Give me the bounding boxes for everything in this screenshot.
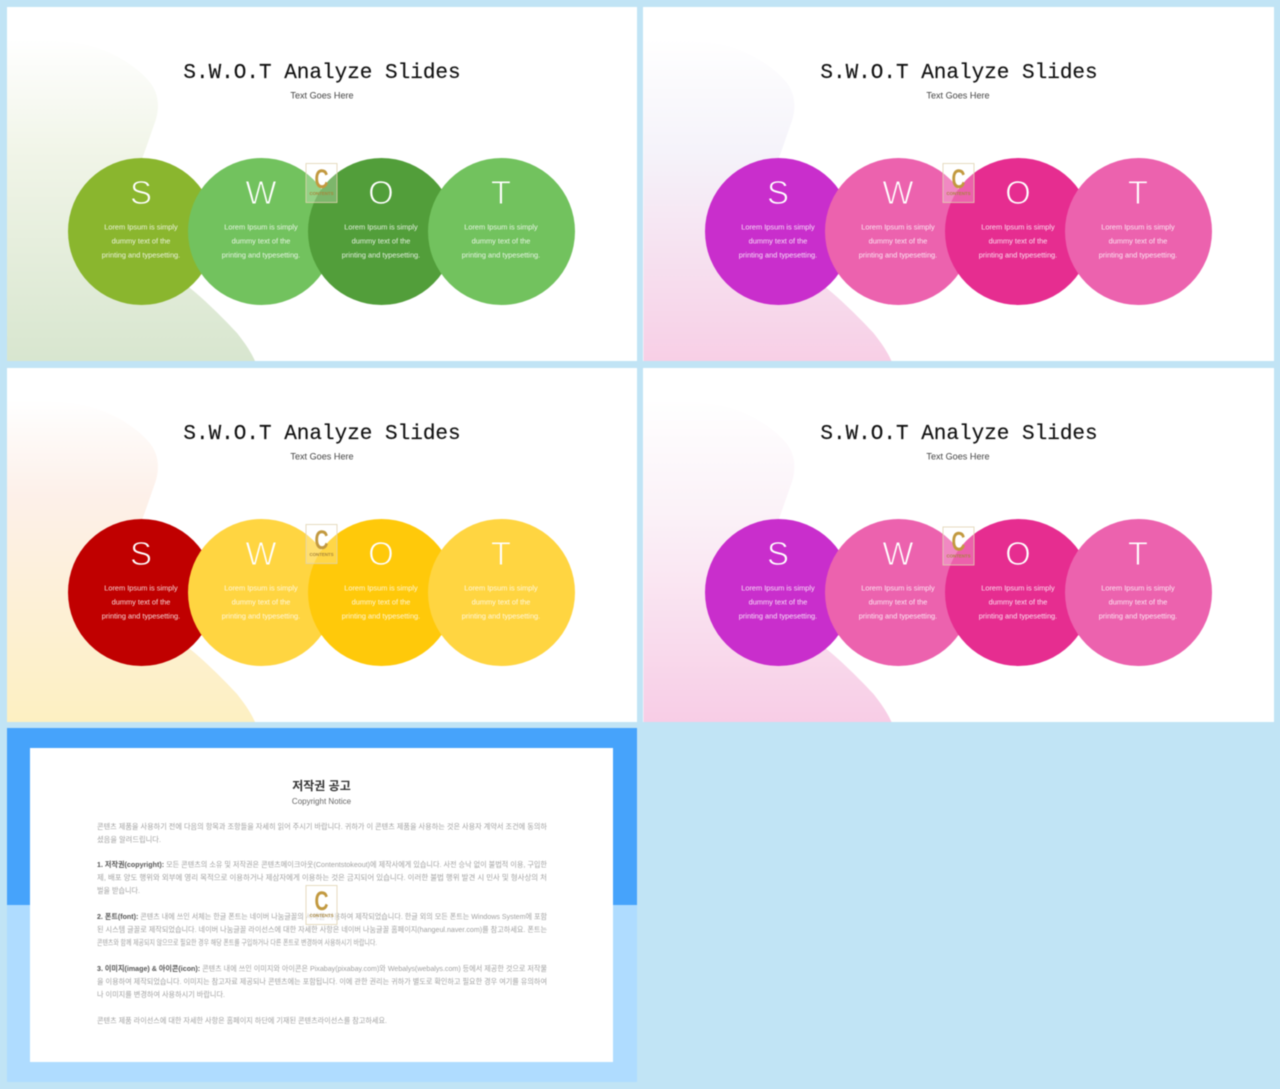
title: S.W.O.T Analyze Slides <box>820 423 1098 446</box>
section 3: image and icon: 을 이용하여 제작되었습니다. 이미지는 참고자료 제공되나 콘텐츠에는 포함됩니다. 이에 관한 권리는 귀하가 별도로 확인하고 필요한 경우 여기를 유의하여 <box>97 976 547 986</box>
circle O <box>945 158 1092 305</box>
circle O: Lorem Ipsum is simply <box>981 584 1055 592</box>
subtitle: Text Goes Here <box>290 452 354 462</box>
circle W: printing and typesetting. <box>222 250 300 260</box>
circle S: Lorem Ipsum is simply <box>104 222 178 232</box>
circle O: Lorem Ipsum is simply <box>344 222 418 232</box>
circle W: W <box>882 535 914 572</box>
circle T <box>1065 158 1212 305</box>
circle O: printing and typesetting. <box>979 250 1057 260</box>
circle O: dummy text of the <box>989 236 1047 246</box>
circle T: printing and typesetting. <box>462 612 540 620</box>
circle S: Lorem Ipsum is simply <box>741 584 815 592</box>
circle W: printing and typesetting. <box>859 250 937 260</box>
circle S: dummy text of the <box>749 598 807 606</box>
watermark logo: CONTENTS <box>310 552 334 557</box>
slide 5: copyright notice <box>7 728 637 1082</box>
circle S: dummy text of the <box>112 598 170 606</box>
circle O: dummy text of the <box>989 598 1047 606</box>
watermark logo <box>306 524 337 564</box>
watermark logo <box>306 886 337 924</box>
white notice panel <box>30 748 613 1062</box>
watermark logo: C <box>952 164 966 194</box>
circle W: printing and typesetting. <box>859 612 937 620</box>
circle W: W <box>882 174 914 211</box>
circle T <box>1065 519 1212 666</box>
background blob: peach to yellow <box>7 400 255 722</box>
circle S: Lorem Ipsum is simply <box>741 222 815 232</box>
circle T: dummy text of the <box>1109 598 1167 606</box>
circle S: printing and typesetting. <box>102 612 180 620</box>
watermark logo <box>306 164 337 202</box>
circle W: Lorem Ipsum is simply <box>861 222 935 232</box>
circle W <box>825 158 972 305</box>
circle T: printing and typesetting. <box>1099 250 1177 260</box>
slide 4: magenta SWOT variant <box>643 368 1274 722</box>
section 3: image and icon <box>97 963 547 999</box>
circle W <box>825 519 972 666</box>
upper blue band <box>7 728 637 905</box>
watermark logo <box>943 164 974 202</box>
watermark logo: C <box>952 526 966 556</box>
watermark logo <box>943 526 974 565</box>
circle T: T <box>491 174 511 211</box>
watermark logo: C <box>314 886 328 916</box>
title: S.W.O.T Analyze Slides <box>183 423 461 446</box>
section 1: copyright: 벌을 받습니다. <box>97 885 140 895</box>
watermark logo: CONTENTS <box>946 191 970 196</box>
circle T: dummy text of the <box>472 598 530 606</box>
watermark logo: CONTENTS <box>946 554 970 558</box>
slide 1: green SWOT <box>7 7 637 361</box>
section 3: image and icon: 나 이미지를 변경하여 사용하시기 바랍니다. <box>97 989 225 999</box>
background blob: green <box>7 39 255 361</box>
circle W: dummy text of the <box>232 598 290 606</box>
slide 3: red and yellow SWOT <box>7 368 637 722</box>
notice heading: 저작권 공고 <box>292 778 351 793</box>
subtitle: Text Goes Here <box>926 452 990 462</box>
subtitle: Text Goes Here <box>926 90 990 100</box>
circle T: T <box>1128 174 1148 211</box>
circle S: dummy text of the <box>749 236 807 246</box>
circle O <box>308 519 455 666</box>
circle W <box>188 519 335 666</box>
circle O: printing and typesetting. <box>342 612 420 620</box>
watermark logo: CONTENTS <box>310 913 334 918</box>
circle O: printing and typesetting. <box>979 612 1057 620</box>
circle W: Lorem Ipsum is simply <box>861 584 935 592</box>
circle S: printing and typesetting. <box>739 250 817 260</box>
circle W <box>188 158 335 305</box>
circle S <box>68 158 215 305</box>
circle S: Lorem Ipsum is simply <box>104 584 178 592</box>
section 2: font: 콘텐츠와 함께 제공되지 않으므로 필요한 경우 해당 폰트를 구입하거나 다른 폰트로 변경하여 사용하시기 바랍니다. <box>97 937 377 947</box>
section 2: font: 2. 폰트(font): 콘텐츠 내에 쓰인 서체는 한글 폰트는 네이버 나눔글꼴의 서체를 사용하여 제작되었습니다. 한글 외의 모든 폰트는 Windows System에 포함 <box>97 911 547 921</box>
circle O: O <box>368 174 394 211</box>
circle W: dummy text of the <box>232 236 290 246</box>
background blob: lavender to pink <box>644 39 892 361</box>
circle O: dummy text of the <box>352 236 410 246</box>
watermark logo: C <box>314 164 328 194</box>
circle S: S <box>130 174 152 211</box>
circle W: Lorem Ipsum is simply <box>224 222 298 232</box>
circle T: printing and typesetting. <box>462 250 540 260</box>
circle O: printing and typesetting. <box>342 250 420 260</box>
title: S.W.O.T Analyze Slides <box>183 62 461 85</box>
subtitle: Text Goes Here <box>290 90 354 100</box>
watermark logo: C <box>314 525 328 555</box>
circle T: Lorem Ipsum is simply <box>464 584 538 592</box>
notice intro: 셨음을 알려드립니다. <box>97 834 161 844</box>
circle O: O <box>1005 174 1031 211</box>
section 2: font <box>97 911 547 947</box>
circle W: dummy text of the <box>869 598 927 606</box>
notice intro: 콘텐츠 제품을 사용하기 전에 다음의 항목과 조항들을 자세히 읽어 주시기 바랍니다. 귀하가 이 콘텐츠 제품을 사용하는 것은 사용자 계약서 조건에 동의하 <box>97 821 547 831</box>
circle S: printing and typesetting. <box>102 250 180 260</box>
section 1: copyright: 1. 저작권(copyright): 모든 콘텐츠의 소유 및 저작권은 콘텐츠메이크아웃(Contentstokeout)에 제작사에게 있습니다. 사전 승낙 없이 불법적 이용, 구입한 <box>97 859 547 869</box>
circle S: printing and typesetting. <box>739 612 817 620</box>
slide 2: magenta SWOT <box>643 7 1274 361</box>
circle T: Lorem Ipsum is simply <box>1101 584 1175 592</box>
circle S: S <box>767 535 789 572</box>
circle T: printing and typesetting. <box>1099 612 1177 620</box>
circle T: Lorem Ipsum is simply <box>1101 222 1175 232</box>
notice intro <box>97 821 547 844</box>
section 1: copyright: 제, 배포 양도 행위와 외부에 영리 목적으로 이용하거나 제삼자에게 이용하는 것은 금지되어 있습니다. 이러한 불법 행위 발견 시 민사 및 형사상의 처 <box>97 872 547 882</box>
circle O: Lorem Ipsum is simply <box>344 584 418 592</box>
background blob: white to pink <box>644 400 892 722</box>
circle T <box>428 519 575 666</box>
circle W: dummy text of the <box>869 236 927 246</box>
circle W: W <box>245 535 277 572</box>
circle T <box>428 158 575 305</box>
circle W: printing and typesetting. <box>222 612 300 620</box>
circle S <box>705 519 852 666</box>
circle T: dummy text of the <box>472 236 530 246</box>
circle S <box>68 519 215 666</box>
watermark logo: CONTENTS <box>310 191 334 196</box>
closing line: 콘텐츠 제품 라이선스에 대한 자세한 사항은 홈페이지 하단에 기재된 콘텐츠라이선스를 참고하세요. <box>97 1015 387 1025</box>
circle S <box>705 158 852 305</box>
circle O: O <box>1005 535 1031 572</box>
circle O <box>308 158 455 305</box>
circle T: dummy text of the <box>1109 236 1167 246</box>
circle W: Lorem Ipsum is simply <box>224 584 298 592</box>
lower light blue band <box>7 905 637 1082</box>
circle O <box>945 519 1092 666</box>
section 3: image and icon: 3. 이미지(image) & 아이콘(icon): 콘텐츠 내에 쓰인 이미지와 아이콘은 Pixabay(pixabay.com)와 Webalys(webalys.com) 등에서 제공한 것으로 저작물 <box>97 963 547 973</box>
circle O: O <box>368 535 394 572</box>
circle T: T <box>1128 535 1148 572</box>
circle T: T <box>491 535 511 572</box>
circle W: W <box>245 174 277 211</box>
circle T: Lorem Ipsum is simply <box>464 222 538 232</box>
circle S: dummy text of the <box>112 236 170 246</box>
circle O: dummy text of the <box>352 598 410 606</box>
circle S: S <box>130 535 152 572</box>
notice subheading: Copyright Notice <box>292 797 352 806</box>
section 1: copyright <box>97 859 547 895</box>
circle O: Lorem Ipsum is simply <box>981 222 1055 232</box>
title: S.W.O.T Analyze Slides <box>820 62 1098 85</box>
circle S: S <box>767 174 789 211</box>
section 2: font: 된 시스템 글꼴로 제작되었습니다. 네이버 나눔글꼴 라이선스에 대한 자세한 사항은 네이버 나눔글꼴 홈페이지(hangeul.naver.com)를 참고하세요. 폰트는 <box>97 924 547 934</box>
